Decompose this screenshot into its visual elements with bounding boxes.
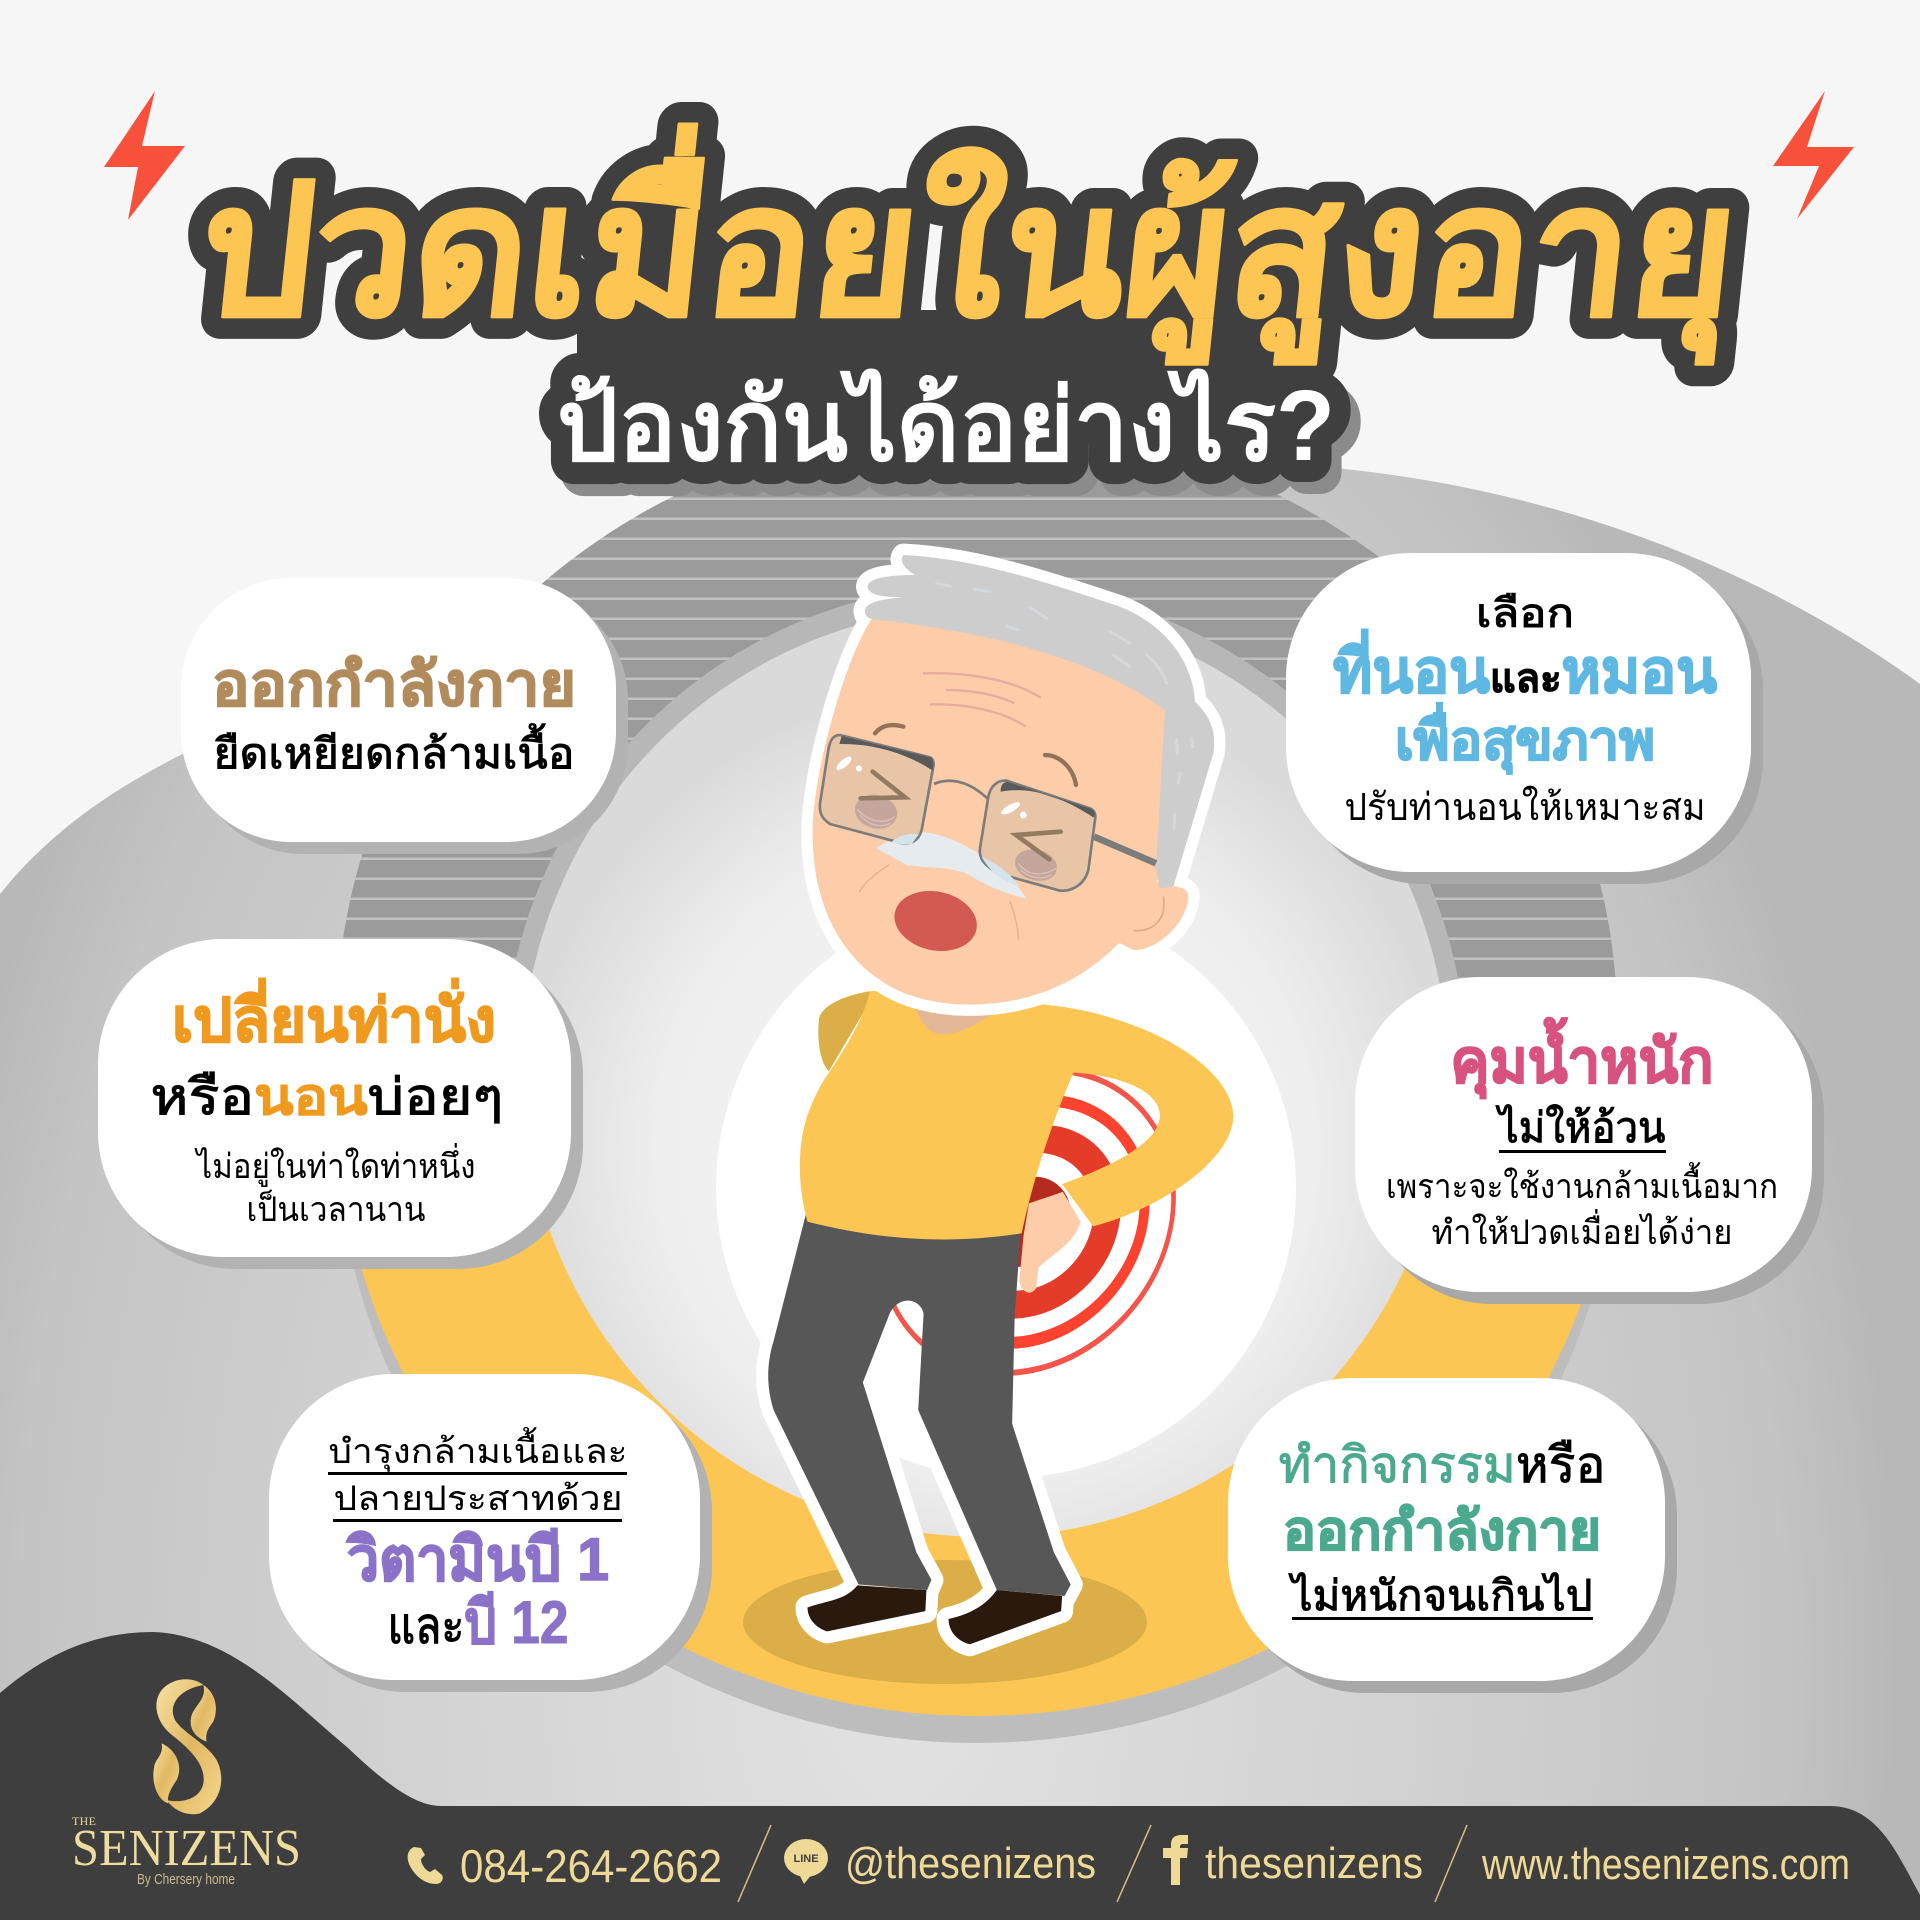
lens glints bbox=[834, 755, 854, 772]
icon: phone bbox=[408, 1847, 443, 1884]
card shadow bbox=[1298, 565, 1763, 884]
logo text: the: THE bbox=[72, 1814, 96, 1828]
contact bar bbox=[408, 1825, 1850, 1902]
ring: inner light disc bbox=[522, 607, 1448, 1537]
shoes outline bbox=[807, 1585, 1062, 1644]
card: bedding bbox=[1286, 553, 1763, 884]
central ring bbox=[337, 425, 1617, 1743]
card heading line 1: ที่นอนและหมอน bbox=[1333, 629, 1717, 705]
card heading line 2: เพื่อสุขภาพ bbox=[1395, 702, 1655, 775]
hand bbox=[1019, 1192, 1081, 1293]
card text line 2: ปลายประสาทด้วย bbox=[334, 1480, 622, 1518]
card body bbox=[1286, 553, 1751, 872]
card heading line 2: ออกกำลังกาย bbox=[1283, 1501, 1601, 1561]
ring: striped upper half bbox=[337, 425, 1617, 1150]
icon: line: LINE bbox=[793, 1853, 819, 1865]
footer band bbox=[0, 1632, 1920, 1920]
card heading: วิตามินบี 1 bbox=[346, 1526, 609, 1593]
title bbox=[190, 124, 1749, 494]
card: exercise bbox=[181, 578, 628, 854]
title: yellow fill: ปวดเมื่อยในผู้สูงอายุ bbox=[190, 124, 1749, 365]
card shadow bbox=[193, 590, 628, 854]
icon: lightning right bbox=[1773, 91, 1854, 219]
facebook handle: thesenizens bbox=[1205, 1839, 1423, 1888]
card subheading: ไม่ให้อ้วน bbox=[1496, 1104, 1666, 1151]
icon: lightning left bbox=[104, 91, 185, 220]
ring: inner band bbox=[516, 602, 1458, 984]
mouth bbox=[889, 884, 983, 958]
card text: choose: เลือก bbox=[1476, 592, 1574, 636]
card shadow bbox=[281, 1386, 712, 1692]
card body bbox=[1228, 1378, 1665, 1681]
website: www.thesenizens.com bbox=[1481, 1840, 1850, 1889]
logo mark bbox=[153, 1679, 221, 1814]
neck bbox=[913, 1001, 1004, 1034]
forehead wrinkles bbox=[859, 673, 1040, 940]
card text line 2: เป็นเวลานาน bbox=[246, 1189, 426, 1229]
pain target rings bbox=[847, 1020, 1207, 1424]
card text line 2: ทำให้ปวดเมื่อยได้ง่าย bbox=[1432, 1209, 1732, 1252]
logo text: senizens: SENIZENS bbox=[72, 1820, 301, 1877]
glasses lenses bbox=[820, 735, 934, 843]
card text: ยืดเหยียดกล้ามเนื้อ bbox=[214, 723, 574, 777]
card: posture bbox=[98, 939, 583, 1269]
moustache bbox=[877, 832, 1027, 898]
card: weight bbox=[1355, 977, 1824, 1304]
glasses bridge and temple bbox=[934, 781, 988, 799]
line handle: @thesenizens bbox=[845, 1839, 1096, 1888]
glasses top bars bbox=[839, 736, 933, 771]
card heading: ออกกำลังกาย bbox=[212, 651, 576, 718]
card body bbox=[98, 939, 571, 1257]
icon: line bbox=[784, 1839, 828, 1884]
phone number: 084-264-2662 bbox=[460, 1840, 722, 1892]
icon: facebook bbox=[1163, 1835, 1188, 1885]
eye bag lines bbox=[857, 809, 1057, 878]
card shadow bbox=[1240, 1390, 1677, 1693]
title: dark outline: ปวดเมื่อยในผู้สูงอายุ bbox=[190, 124, 1749, 365]
card heading line 1: ทำกิจกรรมหรือ bbox=[1278, 1437, 1606, 1493]
card subheading: หรือ นอน บ่อยๆ bbox=[150, 1069, 504, 1125]
card: vitamin bbox=[269, 1374, 712, 1692]
card shadow bbox=[1367, 989, 1824, 1304]
ground shadow bbox=[743, 1560, 1147, 1684]
background grey blob bbox=[0, 462, 1920, 1920]
logo text: byline: By Chersery home bbox=[137, 1871, 235, 1888]
title: subtitle shadow: ป้องกันได้อย่างไร? bbox=[567, 381, 1345, 494]
card text line 1: บำรุงกล้ามเนื้อและ bbox=[328, 1427, 628, 1472]
card heading: คุมน้ำหนัก bbox=[1450, 1017, 1714, 1099]
ring: yellow lower half bbox=[362, 1229, 1581, 1716]
eyebrows bbox=[875, 725, 1076, 785]
sweater shoulder bbox=[818, 991, 870, 1071]
underline bbox=[333, 1519, 622, 1522]
ear bbox=[1113, 882, 1188, 950]
card heading: เปลี่ยนท่านั่ง bbox=[172, 978, 496, 1054]
underline bbox=[328, 1472, 627, 1475]
underline bbox=[1499, 1150, 1666, 1153]
eye bags bbox=[851, 790, 901, 833]
divider bbox=[1435, 1825, 1467, 1902]
hair highlights bbox=[937, 583, 1193, 828]
card shadow bbox=[110, 951, 583, 1269]
closed eyes bbox=[861, 772, 1061, 859]
card subheading: และบี 12 bbox=[388, 1589, 568, 1656]
head bbox=[813, 555, 1214, 1005]
head white outline bbox=[813, 555, 1214, 1005]
card body bbox=[1355, 977, 1812, 1292]
ring: lower shadow bbox=[337, 1100, 1617, 1743]
logo bbox=[72, 1679, 301, 1888]
ring: white disc bbox=[716, 898, 1296, 1478]
card text: ไม่หนักจนเกินไป bbox=[1288, 1572, 1592, 1619]
divider bbox=[738, 1825, 771, 1902]
body bbox=[768, 988, 1234, 1644]
hair bbox=[865, 555, 1214, 888]
card text line 1: ไม่อยู่ในท่าใดท่าหนึ่ง bbox=[194, 1143, 476, 1187]
card text line 1: เพราะจะใช้งานกล้ามเนื้อมาก bbox=[1386, 1162, 1778, 1206]
face bbox=[813, 617, 1167, 1005]
title: joining dark block bbox=[577, 310, 1329, 410]
card text: ปรับท่านอนให้เหมาะสม bbox=[1344, 786, 1706, 829]
elderly man illustration bbox=[768, 555, 1234, 1644]
card body bbox=[181, 578, 616, 842]
sweater bbox=[800, 988, 1234, 1239]
trousers outline bbox=[756, 1343, 1083, 1604]
divider bbox=[1117, 1825, 1151, 1902]
moustache over lens bbox=[892, 834, 1020, 887]
trousers bbox=[768, 1215, 1071, 1596]
title: subtitle: ป้องกันได้อย่างไร? bbox=[557, 369, 1335, 482]
card body bbox=[269, 1374, 700, 1680]
ear line bbox=[1133, 897, 1164, 931]
card: activity bbox=[1228, 1378, 1677, 1693]
underline bbox=[1292, 1617, 1593, 1620]
shoes bbox=[807, 1585, 1062, 1644]
